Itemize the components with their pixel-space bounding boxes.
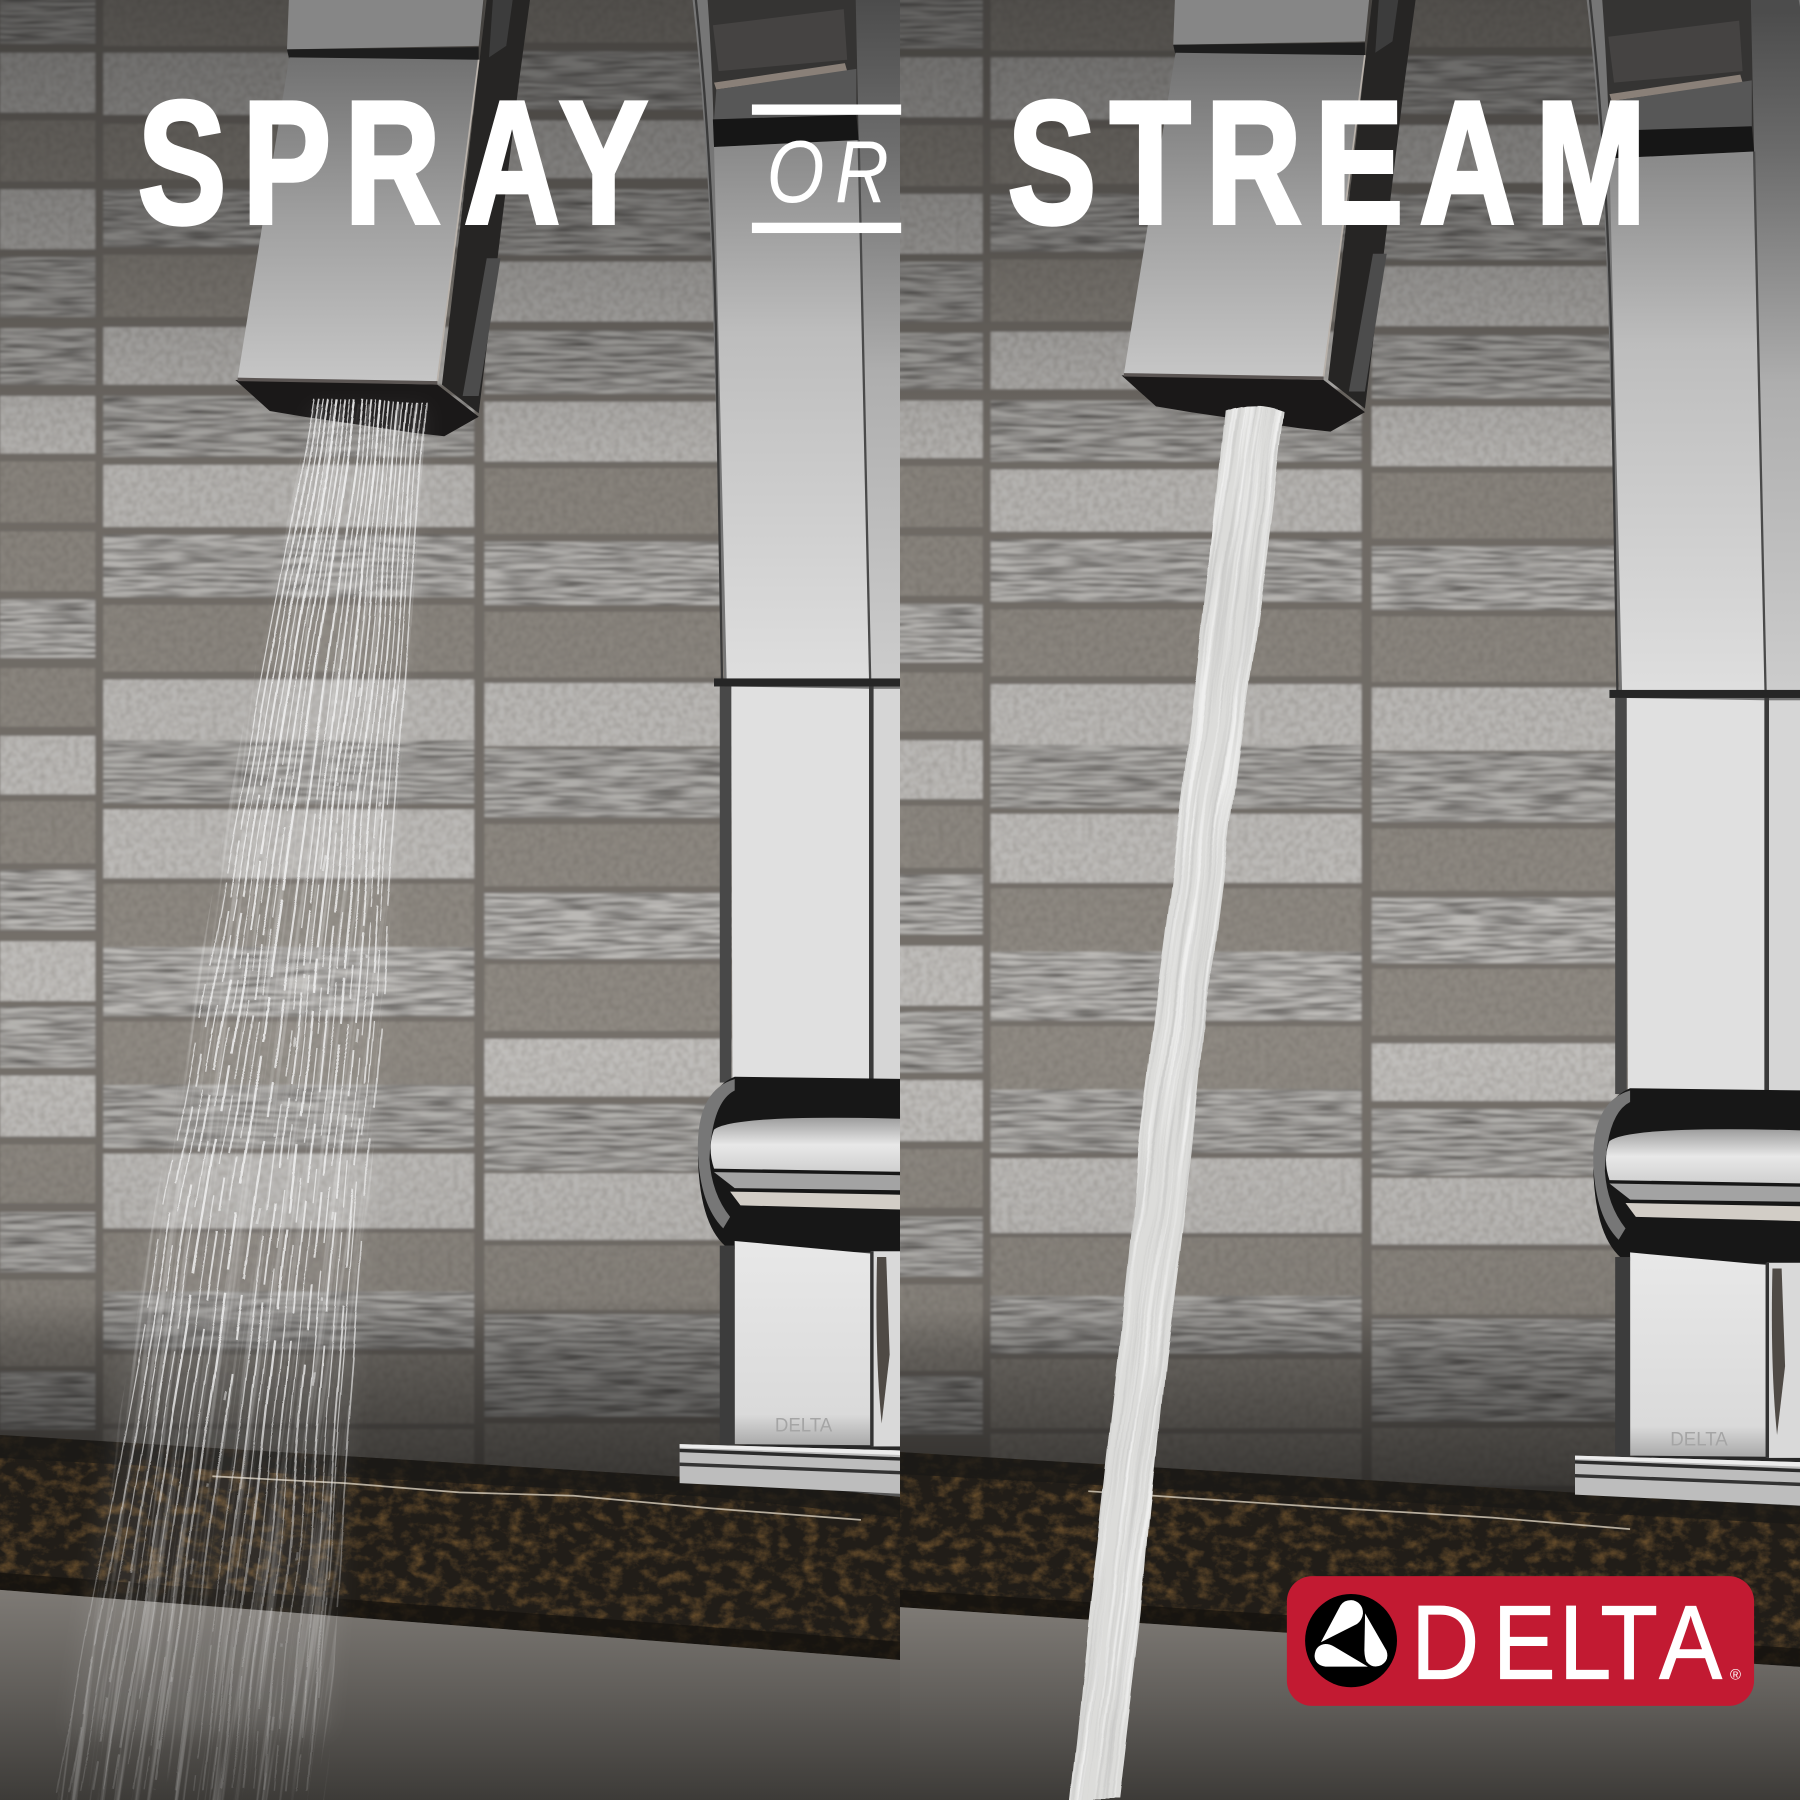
faucet body [680, 0, 918, 1495]
spray water veil [69, 408, 427, 1733]
granite countertop [900, 1452, 1800, 1667]
granite countertop [0, 1435, 900, 1660]
sink basin [0, 1590, 900, 1800]
pull-down spout [1122, 0, 1418, 432]
icon: Delta triangle mark [1305, 1594, 1397, 1687]
title word: SPRAY: SPRAY [138, 65, 648, 260]
wordmark: DELTA: DELTA [1411, 1585, 1723, 1701]
spray water streams [57, 402, 427, 1791]
divider label: OR with rules [752, 104, 901, 233]
registered mark: ® [1730, 1666, 1741, 1683]
faucet engraved brand: DELTA [775, 1415, 832, 1437]
wall shading [0, 0, 900, 1492]
sink basin [900, 1607, 1800, 1800]
panel: spray [0, 0, 918, 1800]
tile wall [0, 0, 746, 1504]
pull-down spout [235, 0, 532, 436]
stream water column [847, 396, 1540, 1800]
spray fine mist streaks [58, 404, 426, 1800]
wall shading [900, 0, 1800, 1504]
panel: stream [847, 0, 1800, 1800]
faucet engraved brand: DELTA [1670, 1428, 1728, 1450]
title word: STREAM: STREAM [1008, 65, 1646, 260]
faucet body [1575, 0, 1800, 1506]
tile wall [876, 0, 1634, 1508]
divider label: OR with rules: OR [767, 123, 889, 222]
logo: Delta badge [1287, 1576, 1754, 1706]
